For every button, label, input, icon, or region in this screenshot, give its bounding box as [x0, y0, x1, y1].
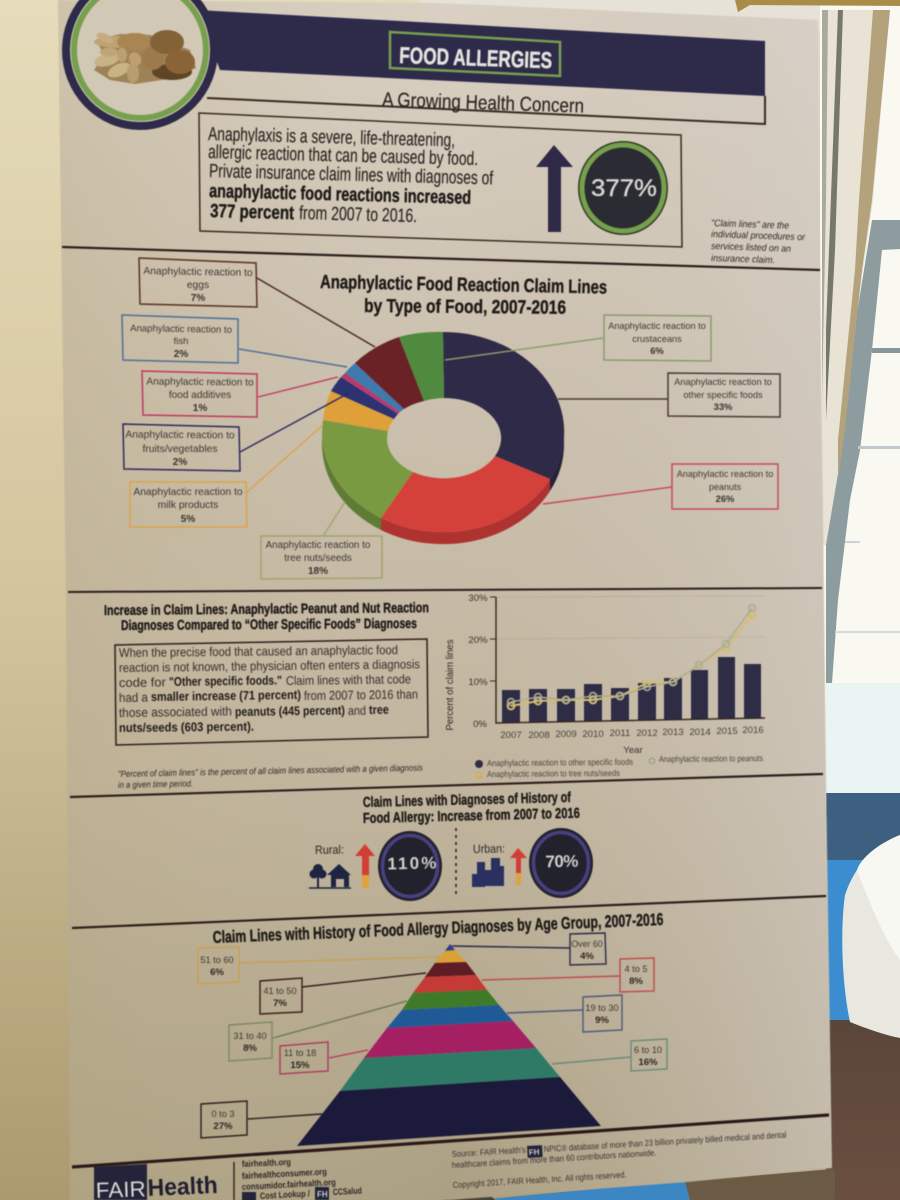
line: tree nuts: [508, 612, 755, 709]
callout: 19 to 30: [507, 995, 622, 1032]
callout: food additives: 1%: [193, 403, 207, 414]
callout: over 60: 4%: [580, 951, 594, 962]
text block: other specific foods explanation: those associated with: [119, 704, 232, 720]
note: percent of claim lines: in a given time period.: [118, 778, 193, 790]
band: over 60: [445, 944, 455, 951]
text block: anaphylaxis definition: Private insurance claim lines with diagnoses of: [209, 161, 494, 189]
heading: donut chart title: [320, 272, 607, 319]
callout: over 60: Over 60: [571, 939, 603, 949]
footer: source and copyright: [452, 1130, 787, 1190]
callout: tree nuts/seeds: tree nuts/seeds: [284, 553, 352, 564]
callout: peanuts: [543, 464, 778, 509]
heading: history of food allergy: Food Allergy: Increase from 2007 to 2016: [363, 806, 580, 827]
panel: rural: [309, 831, 442, 901]
heading: history of food allergy: Claim Lines with Diagnoses of History of: [363, 790, 571, 811]
callout: crustaceans: 6%: [650, 345, 664, 356]
title: FOOD ALLERGIES: [399, 42, 553, 73]
footer: source and copyright: healthcare claims from more than 60 contributors nationwide.: [452, 1147, 657, 1170]
text block: anaphylaxis definition: anaphylactic food reactions increased: [209, 181, 471, 209]
band: 4 to 5: [413, 975, 487, 993]
callout: milk products: [130, 425, 323, 527]
callout: peanuts: 26%: [716, 493, 735, 504]
callout: 4 to 5: 4 to 5: [624, 964, 648, 974]
legend: Anaphylactic reaction to other specific foods: [487, 757, 633, 768]
footer: links: [242, 1157, 362, 1200]
callout: food additives: [142, 371, 338, 417]
footer: source and copyright: NPIC® database of more than 23 billion privately billed medical and dental: [544, 1130, 787, 1154]
callout: 51 to 60: [198, 947, 440, 984]
band: 41 to 50: [425, 962, 476, 977]
band: 0 to 3: [297, 1077, 601, 1146]
chart: percent of claim lines 2007-2016: [445, 593, 765, 779]
icon: red up arrow: [355, 844, 375, 875]
text block: other specific foods explanation: nuts/seeds (603 percent).: [119, 720, 254, 735]
footer: source and copyright: Source: FAIR Health's: [452, 1145, 526, 1159]
callout: 11 to 18: [280, 1042, 368, 1074]
note: claim lines definition: services listed on an: [711, 241, 791, 255]
slice: additives 1%: [341, 373, 400, 414]
slice: milk 5%: [323, 391, 394, 431]
legend: [473, 753, 763, 779]
subtitle frame lines: [207, 96, 765, 124]
x axis labels: 2012: [636, 728, 658, 739]
callout: food additives: food additives: [169, 390, 231, 401]
footer: source and copyright: FH: [529, 1147, 540, 1157]
pyramid chart: claim lines by age group: [297, 944, 601, 1146]
banner bar: [198, 10, 765, 96]
callout: 6 to 10: 6 to 10: [634, 1045, 662, 1055]
callout: peanuts: Anaphylactic reaction to: [677, 469, 773, 479]
subtitle: A Growing Health Concern: [382, 89, 584, 118]
bars: other specific foods: [502, 657, 761, 723]
text block: other specific foods explanation: had a: [119, 691, 148, 705]
callout: tree nuts/seeds: [261, 502, 382, 579]
callout: tree nuts/seeds: 18%: [308, 566, 328, 577]
stat badge: 377%: [579, 142, 667, 234]
callout: food additives: Anaphylactic reaction to: [146, 376, 254, 389]
y axis ticks: 0%: [473, 719, 487, 730]
heading: donut chart title: Anaphylactic Food Reaction Claim Lines: [320, 272, 607, 299]
slice: tree nuts 18%: [322, 420, 413, 518]
note: claim lines definition: individual procedures or: [711, 229, 806, 243]
text block: other specific foods explanation: peanuts (445 percent): [235, 703, 345, 719]
callout: fish: [122, 315, 347, 367]
callout: fish: fish: [174, 336, 188, 347]
heading: claim line increase: [104, 599, 429, 633]
footer: source and copyright: Copyright 2017, FAIR Health, Inc. All rights reserved.: [453, 1169, 627, 1190]
callout: other specific foods: [558, 373, 780, 417]
callout: 4 to 5: 8%: [629, 976, 643, 987]
callout: fruits/vegetables: Anaphylactic reaction to: [125, 430, 235, 441]
text block: other specific foods explanation: [115, 639, 428, 745]
callout: 41 to 50: 41 to 50: [263, 986, 297, 996]
callout: eggs: Anaphylactic reaction to: [143, 266, 253, 279]
callout: fruits/vegetables: fruits/vegetables: [143, 444, 217, 455]
slice: fruits/vegetables 2%: [331, 377, 398, 419]
callout: 0 to 3: [201, 1101, 322, 1138]
footer: links: FH: [317, 1190, 328, 1199]
text block: other specific foods explanation: and: [348, 704, 366, 718]
callout: peanuts: peanuts: [709, 482, 742, 492]
heading: donut chart title: by Type of Food, 2007-2016: [364, 296, 566, 319]
note: percent of claim lines: [118, 763, 423, 790]
callout: eggs: eggs: [187, 280, 209, 291]
note: percent of claim lines: "Percent of claim lines" is the percent of all claim lines associated with a given diagnosis: [118, 763, 423, 779]
callout: crustaceans: [445, 315, 711, 361]
callout: 41 to 50: 7%: [273, 998, 287, 1009]
callout: 19 to 30: 19 to 30: [585, 1003, 619, 1013]
slice: eggs 7%: [355, 337, 424, 409]
callout: milk products: Anaphylactic reaction to: [133, 487, 243, 498]
callout: 19 to 30: 9%: [595, 1015, 609, 1026]
x axis labels: 2011: [610, 728, 630, 739]
callout: 51 to 60: 6%: [210, 967, 224, 978]
text block: anaphylaxis definition: [199, 113, 682, 247]
icon: nuts in circular badge: [66, 0, 214, 126]
callout: milk products: 5%: [181, 514, 195, 525]
callout: eggs: 7%: [191, 293, 205, 304]
x axis labels: 2009: [555, 729, 577, 740]
heading: pyramid title: Claim Lines with History of Food Allergy Diagnoses by Age Group, 2007-2016: [212, 910, 664, 947]
callout: fish: Anaphylactic reaction to: [130, 323, 232, 336]
y axis ticks: 10%: [468, 677, 488, 688]
callout: other specific foods: other specific foods: [683, 390, 763, 400]
callout: 41 to 50: [260, 973, 426, 1014]
legend: Anaphylactic reaction to peanuts: [659, 753, 763, 764]
band: 6 to 10: [340, 1048, 560, 1091]
text block: anaphylaxis definition: 377 percent: [210, 201, 295, 224]
icon: city skyline: [472, 858, 504, 887]
callout: fruits/vegetables: 2%: [173, 457, 187, 468]
x axis labels: 2008: [528, 730, 550, 741]
text block: anaphylaxis definition: from 2007 to 2016.: [299, 203, 417, 227]
logo: FAIR Health: [94, 1164, 218, 1200]
slice: other specific foods 33%: [443, 332, 564, 479]
x axis labels: 2007: [500, 730, 522, 741]
x axis labels: 2010: [582, 729, 604, 740]
icon: tree and house: [309, 864, 351, 888]
text block: anaphylaxis definition: allergic reaction that can be caused by food.: [208, 142, 478, 170]
x axis labels: 2013: [662, 727, 684, 738]
callout: fish: 2%: [174, 349, 188, 360]
x axis labels: 2015: [716, 726, 738, 737]
icon: up arrow: [536, 145, 573, 232]
callout: 4 to 5: [482, 958, 654, 992]
x axis labels: Year: [623, 745, 643, 756]
callout: 6 to 10: 16%: [638, 1057, 658, 1068]
x axis labels: [500, 725, 764, 756]
panel: urban: [472, 828, 593, 898]
heading: history of food allergy: [363, 790, 580, 827]
badge: 110%: 110%: [387, 853, 437, 874]
slice: fish 2%: [345, 363, 404, 412]
callout: 31 to 40: [229, 1001, 407, 1061]
callout: 11 to 18: 15%: [290, 1060, 310, 1071]
callout: 51 to 60: 51 to 60: [200, 955, 234, 965]
text block: other specific foods explanation: reaction is not known, the physician often enters a diagnosis: [119, 657, 420, 675]
y axis ticks: 20%: [468, 635, 488, 646]
stat badge: 377%: 377%: [591, 175, 657, 202]
text block: other specific foods explanation: code for: [119, 675, 166, 690]
text block: other specific foods explanation: "Other specific foods.": [169, 673, 282, 689]
footer: links: CCSalud: [333, 1185, 362, 1197]
callout: 31 to 40: 8%: [243, 1043, 257, 1054]
y axis ticks: [468, 593, 765, 730]
icon: red up arrow: [510, 848, 527, 873]
x axis labels: 2016: [742, 725, 764, 736]
callout: crustaceans: Anaphylactic reaction to: [608, 321, 706, 331]
callout: eggs: [139, 258, 375, 347]
callout: 31 to 40: 31 to 40: [233, 1031, 267, 1041]
callout: 0 to 3: 27%: [213, 1121, 233, 1132]
badge: 70%: 70%: [545, 852, 579, 871]
slice: crustaceans 6%: [399, 332, 444, 401]
band: 51 to 60: [435, 950, 466, 963]
text block: other specific foods explanation: tree: [369, 703, 389, 717]
text block: other specific foods explanation: smaller increase (71 percent): [151, 688, 301, 704]
band: 11 to 18: [364, 1021, 536, 1058]
y axis label: Percent of claim lines: [445, 640, 456, 730]
note: claim lines definition: "Claim lines" are the: [711, 218, 789, 232]
donut chart: claim lines by type of food: [322, 332, 564, 544]
text block: other specific foods explanation: When the precise food that caused an anaphylactic food: [119, 643, 398, 660]
y axis ticks: 30%: [468, 593, 488, 604]
footer: links: fairhealthconsumer.org: [242, 1167, 327, 1181]
note: claim lines definition: [711, 218, 806, 266]
legend: Anaphylactic reaction to tree nuts/seeds: [487, 768, 620, 779]
callout: tree nuts/seeds: Anaphylactic reaction to: [266, 540, 371, 551]
callout: 6 to 10: [552, 1039, 667, 1071]
line: peanuts: [508, 605, 755, 705]
heading: claim line increase: Increase in Claim Lines: Anaphylactic Peanut and Nut Reaction: [104, 599, 429, 618]
footer: links: consumidor.fairhealth.org: [242, 1177, 336, 1192]
callout: other specific foods: Anaphylactic reaction to: [674, 377, 772, 387]
slice: peanuts 26%: [381, 456, 550, 532]
callout: over 60: [452, 933, 606, 965]
callout: 11 to 18: 11 to 18: [284, 1048, 316, 1058]
note: claim lines definition: insurance claim.: [711, 253, 775, 266]
panel: urban: Urban:: [473, 841, 505, 856]
callout: other specific foods: 33%: [714, 401, 733, 412]
heading: claim line increase: Diagnoses Compared to “Other Specific Foods” Diagnoses: [121, 615, 417, 633]
text block: other specific foods explanation: Claim lines with that code: [286, 672, 411, 688]
header: title banner: [198, 10, 765, 124]
axes: [496, 597, 765, 723]
text block: anaphylaxis definition: Anaphylaxis is a severe, life-threatening,: [208, 124, 455, 151]
callout: fruits/vegetables: [123, 394, 347, 471]
title box: [390, 32, 560, 76]
callout: crustaceans: crustaceans: [632, 334, 682, 344]
panel: rural: Rural:: [315, 842, 344, 857]
footer: links: fairhealth.org: [242, 1157, 291, 1169]
donut side depth: [550, 432, 564, 491]
x axis labels: 2014: [689, 727, 711, 738]
callout: 0 to 3: 0 to 3: [212, 1109, 234, 1119]
text block: other specific foods explanation: from 2007 to 2016 than: [304, 687, 418, 703]
band: 19 to 30: [387, 1005, 513, 1028]
callout: milk products: milk products: [158, 500, 218, 511]
band: 31 to 40: [402, 990, 499, 1010]
